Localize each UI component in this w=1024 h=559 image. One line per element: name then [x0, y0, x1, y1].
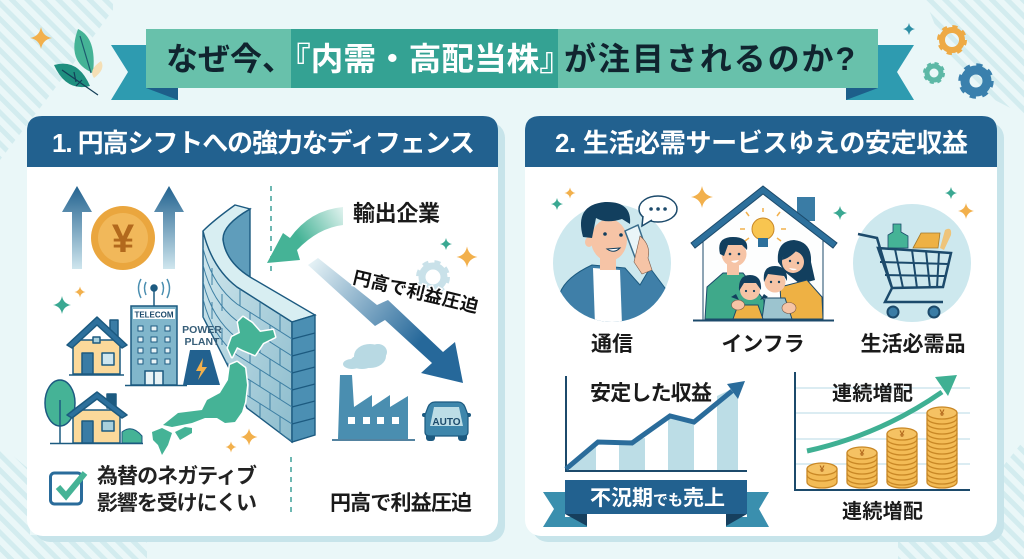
icon: family in house [691, 186, 837, 320]
icon: factory [332, 344, 415, 440]
title ribbon [111, 29, 914, 100]
icon: orange sparkle [30, 27, 52, 49]
chart: stable revenue: 安定した収益 [590, 382, 712, 405]
label: exporters: 輸出企業 [353, 201, 440, 226]
callout: hard to be affected by FX [97, 464, 257, 515]
icon: power plant [182, 324, 222, 385]
panel: yen shift defense [27, 116, 505, 542]
icon: power plant: POWER [182, 324, 222, 336]
divider line [271, 186, 291, 515]
chart: consecutive dividend increases: 連続増配 [842, 499, 923, 523]
coin stacks: ¥ [859, 448, 865, 458]
arrows: yen rising [62, 186, 184, 269]
panel: stable earnings [525, 116, 1004, 542]
chart: consecutive dividend increases: 連続増配 [832, 381, 913, 405]
icon: shopping cart [853, 204, 971, 322]
icon: yen coin: ¥ [112, 217, 135, 261]
coin stacks: ¥ [819, 464, 825, 474]
icon: house [67, 317, 127, 375]
icon: checkbox [50, 473, 85, 504]
category labels: 通信 [591, 333, 633, 356]
icon: telecom building [125, 279, 187, 386]
category labels [591, 333, 966, 356]
sparkles [551, 186, 974, 220]
title ribbon: 『内需・高配当株』 [278, 41, 572, 77]
category labels: 生活必需品 [860, 333, 966, 356]
icon: car [422, 402, 471, 441]
speech bubble [639, 196, 677, 226]
coin stacks [807, 407, 957, 488]
icon: map of Japan [152, 317, 275, 455]
callout: hard to be affected by FX: 影響を受けにくい [97, 492, 257, 515]
ribbon: sales even in recession [543, 480, 769, 527]
panel 1 heading: 1. 円高シフトへの強力なディフェンス [52, 128, 475, 158]
sparkles [440, 238, 478, 268]
arrow: green curved [267, 207, 343, 263]
category labels: インフラ [721, 333, 805, 356]
coin stacks: ¥ [899, 429, 905, 439]
icon: person on phone [553, 196, 677, 330]
coin stacks: ¥ [939, 408, 945, 418]
title text: なぜ今、 [166, 41, 294, 77]
decoration: leaves [54, 29, 102, 95]
chart: stable revenue [566, 376, 747, 471]
icon: brick wall [203, 205, 315, 442]
icon: house with tree [45, 380, 143, 444]
ribbon: sales even in recession: 不況期でも売上 [590, 487, 725, 510]
sparkles [53, 286, 258, 452]
icon: yen coin [91, 206, 155, 270]
icons: gears [903, 23, 992, 96]
icon: faded gear [418, 262, 448, 292]
arrow: dividend growth [807, 375, 957, 451]
panel 2 heading: 2. 生活必需サービスゆえの安定収益 [555, 128, 968, 158]
icon: telecom building: TELECOM [134, 310, 174, 320]
label: profit squeeze: 円高で利益圧迫 [330, 492, 472, 515]
icon: car: AUTO [432, 417, 461, 428]
arrow: falling profits [308, 258, 463, 383]
rotated label: 円高で利益圧迫 [351, 267, 480, 317]
icon: power plant: PLANT [184, 336, 220, 348]
callout: hard to be affected by FX: 為替のネガティブ [97, 464, 257, 488]
chart: consecutive dividend increases [795, 372, 970, 523]
title ribbon: が注目されるのか? [564, 41, 855, 77]
